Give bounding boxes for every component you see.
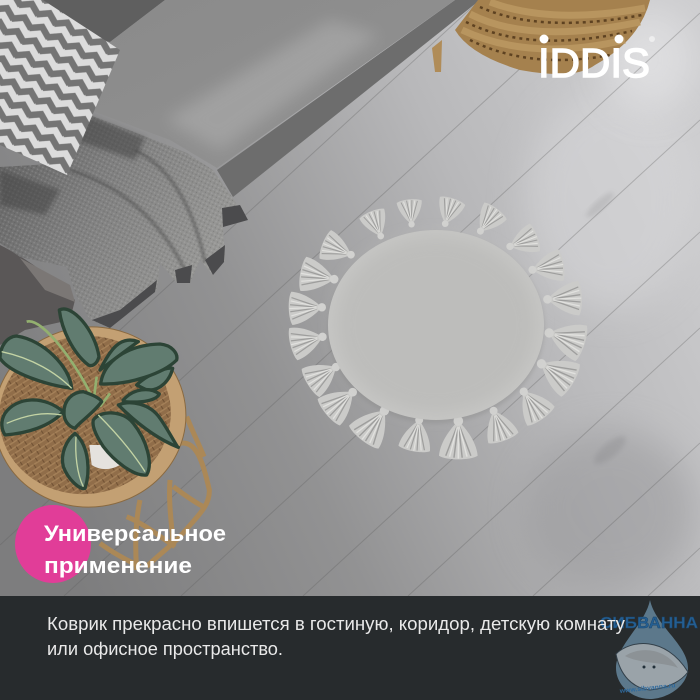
logo: IDDIS <box>538 40 650 86</box>
table legs <box>100 417 209 570</box>
tassels <box>286 194 590 459</box>
rattan table <box>0 315 209 570</box>
watermark title: СИБВАННА <box>600 615 698 632</box>
bath <box>616 644 688 690</box>
watermark url: www.sibvanna.ru <box>618 682 676 695</box>
leaf top <box>59 309 99 366</box>
water drop <box>616 600 688 699</box>
leaf lower left <box>2 400 63 435</box>
leaf bottom <box>62 433 88 488</box>
blanket <box>0 112 248 328</box>
table weave <box>0 336 171 494</box>
sofa arm <box>0 245 75 345</box>
description <box>47 613 626 659</box>
sofa <box>0 0 480 345</box>
rug shadow <box>330 315 545 424</box>
leaf front <box>93 413 149 475</box>
sofa back <box>40 0 165 42</box>
blanket folds <box>70 150 205 270</box>
heading line 1: Универсальное <box>44 521 226 546</box>
leaf left <box>0 336 72 388</box>
rug <box>286 194 590 459</box>
leaf bottom right <box>118 403 178 447</box>
description line 2: или офисное пространство. <box>47 638 283 659</box>
stems <box>27 321 110 407</box>
rug body <box>328 230 544 420</box>
heading line 2: применение <box>44 553 192 578</box>
pouf <box>455 0 650 74</box>
heading <box>44 521 226 578</box>
watermark <box>600 600 698 699</box>
bottom band <box>0 596 700 700</box>
sofa seat <box>85 0 455 168</box>
table ring <box>0 327 186 507</box>
leaf right <box>101 344 177 384</box>
plant <box>0 309 178 488</box>
sofa front band <box>217 0 480 197</box>
description line 1: Коврик прекрасно впишется в гостиную, коридор, детскую комнату <box>47 613 626 634</box>
logo <box>540 34 655 78</box>
back leaves <box>100 340 173 402</box>
pillow <box>0 0 120 175</box>
pink blob <box>15 505 91 583</box>
leaf middle <box>64 392 102 428</box>
sofa leg <box>432 40 442 72</box>
face <box>642 666 656 668</box>
pot <box>89 445 121 469</box>
